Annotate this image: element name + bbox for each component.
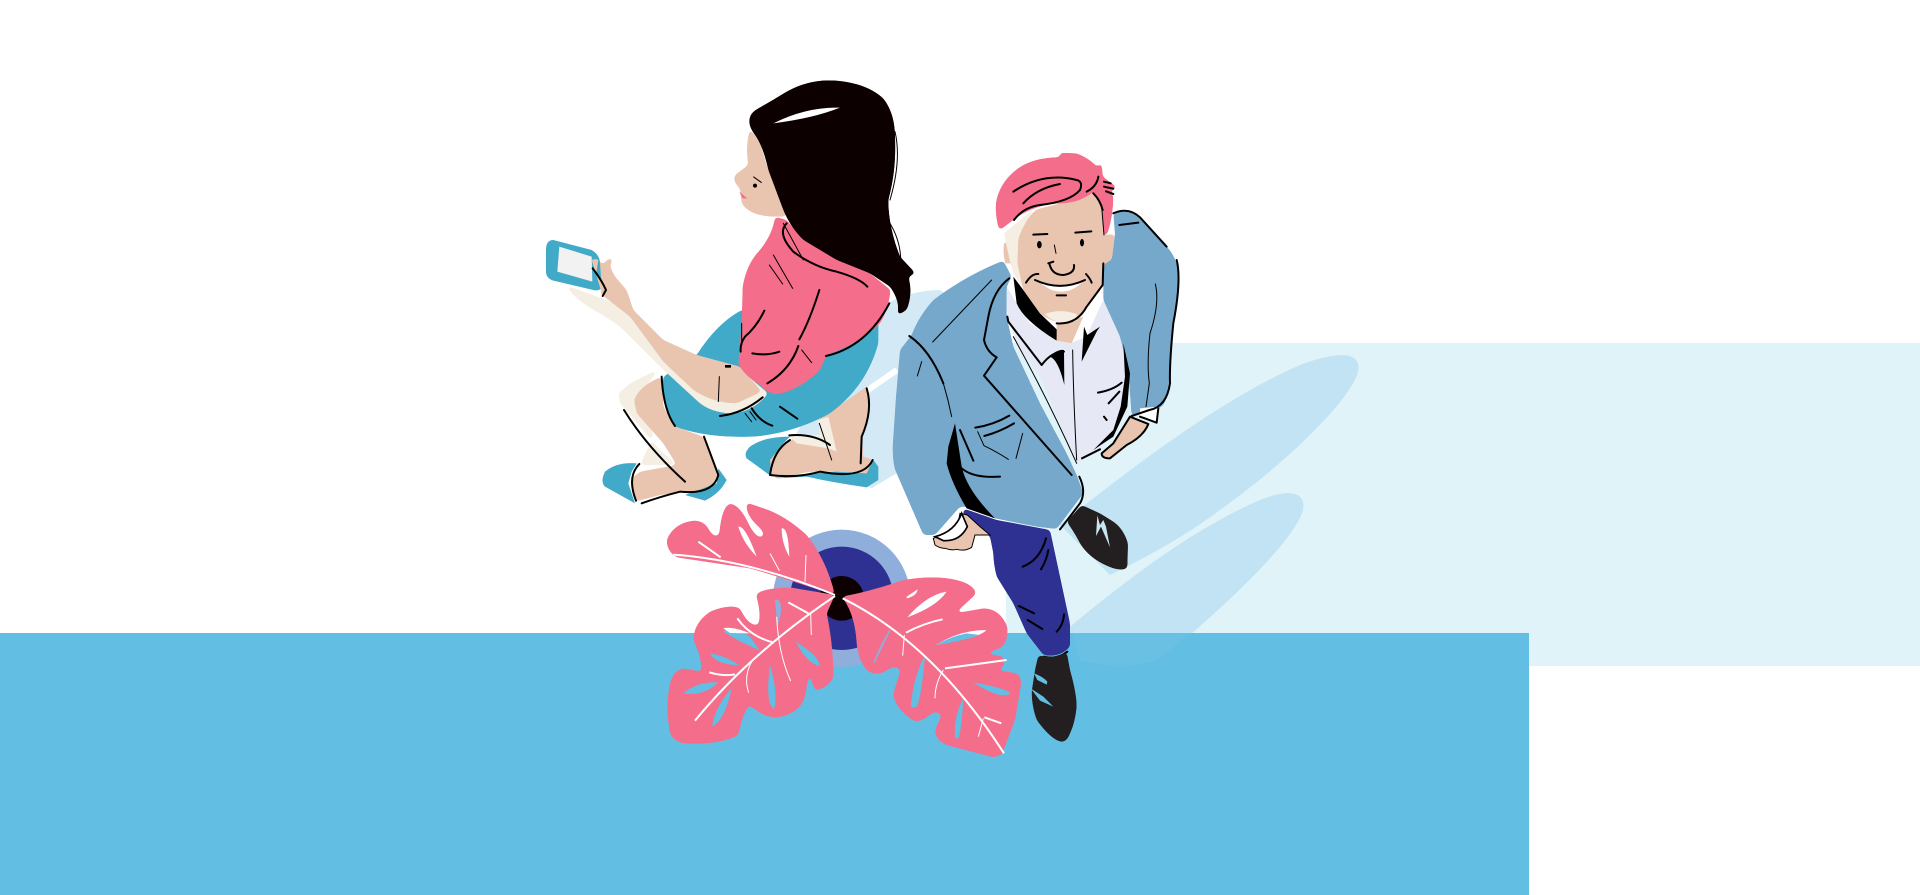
front shoe xyxy=(1031,652,1077,742)
left ear xyxy=(1004,242,1012,263)
left cuff and hand xyxy=(933,513,990,550)
shirt xyxy=(1007,287,1130,463)
right cuff xyxy=(1140,407,1158,423)
monstera leaves xyxy=(667,503,1021,757)
lips and eye xyxy=(739,177,762,198)
jacket body xyxy=(893,261,1083,535)
front shoe xyxy=(602,463,727,503)
man's long shadows xyxy=(1060,355,1358,635)
back leg highlight xyxy=(788,417,837,452)
thin jacket and shirt seams xyxy=(917,207,1157,463)
back shoe xyxy=(1067,505,1128,569)
leaf: right xyxy=(842,577,1021,757)
eyes xyxy=(1037,239,1084,248)
shadow: upper blade xyxy=(1060,355,1358,575)
face xyxy=(1017,193,1115,323)
back leg xyxy=(770,387,873,478)
thin lines on woman xyxy=(718,132,901,460)
outer ring xyxy=(773,530,910,667)
jacket side shadow xyxy=(947,423,995,518)
side of face highlight xyxy=(1004,209,1033,293)
face xyxy=(734,128,787,217)
faint shadow over floor xyxy=(1072,633,1190,666)
collar shadows xyxy=(1043,327,1100,385)
shadow: lower blade xyxy=(1060,493,1303,635)
bullseye xyxy=(819,576,864,621)
skirt xyxy=(663,310,878,437)
shadow highlight stripe xyxy=(820,370,897,423)
smile xyxy=(1036,280,1084,292)
chin highlight xyxy=(1045,311,1077,323)
waist mark xyxy=(725,365,731,368)
hair xyxy=(996,153,1117,236)
middle ring xyxy=(790,547,893,650)
right sleeve xyxy=(1103,211,1179,417)
right hand xyxy=(1102,417,1148,458)
shirt xyxy=(738,217,891,394)
phone xyxy=(546,240,606,296)
trousers xyxy=(963,508,1070,658)
woman's shadow xyxy=(716,290,1000,497)
leaf: upper left xyxy=(667,503,835,595)
arm xyxy=(593,257,762,403)
man upper body xyxy=(893,153,1179,550)
target rings xyxy=(773,530,910,667)
leaf: lower left xyxy=(667,587,835,744)
arm underside xyxy=(565,285,768,413)
back shoe xyxy=(746,437,878,487)
neck xyxy=(1057,317,1083,343)
blue floor panel xyxy=(0,633,1529,895)
man lower body xyxy=(963,505,1128,742)
front leg highlight xyxy=(618,368,677,465)
woman xyxy=(546,80,916,503)
neck shadow xyxy=(1013,277,1057,341)
lines on woman xyxy=(593,223,889,503)
hair highlight xyxy=(773,108,840,123)
hair xyxy=(749,80,916,316)
light blue background panel xyxy=(1006,343,1920,666)
front leg xyxy=(630,377,718,502)
shirt side shadow xyxy=(1093,343,1130,450)
face and jacket lines xyxy=(909,177,1179,529)
